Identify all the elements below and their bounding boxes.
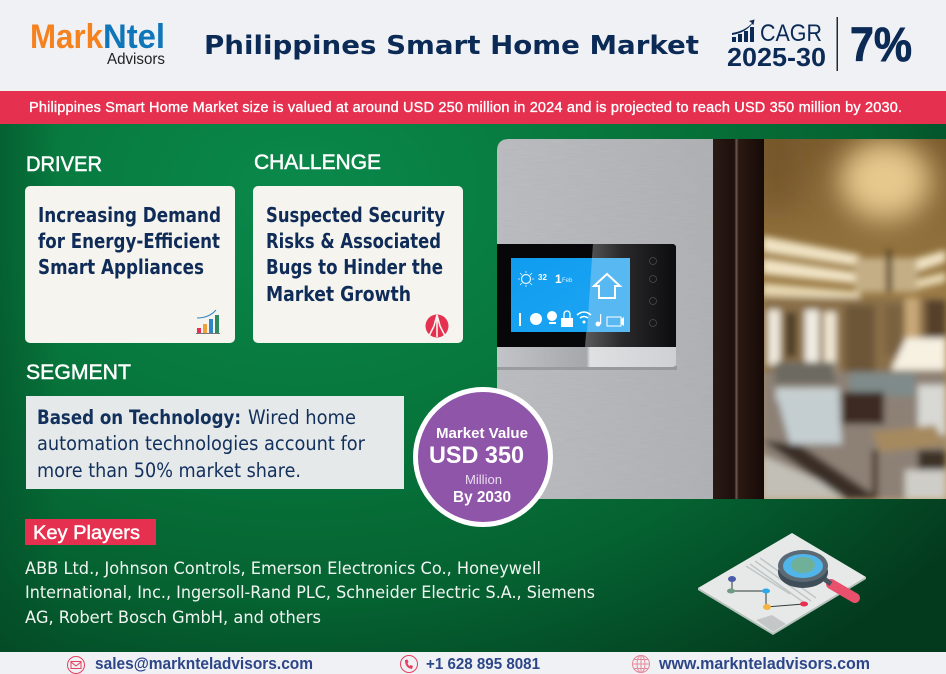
callout: market value circle: Market Value <box>436 425 528 442</box>
touch screen <box>511 258 630 332</box>
touch screen: Feb <box>562 278 573 284</box>
dark door frame <box>713 139 764 499</box>
key players badge <box>25 519 156 545</box>
driver text <box>38 203 221 279</box>
panel: key players <box>25 519 595 628</box>
wall control panel device <box>497 244 677 370</box>
callout: market value circle: Million <box>465 472 502 487</box>
segment box <box>26 396 404 489</box>
CAGR block: CAGR <box>760 20 822 47</box>
callout: market value circle: By 2030 <box>453 489 511 506</box>
panel: segment <box>26 360 404 489</box>
segment text: Wired home <box>248 406 356 429</box>
CAGR block <box>727 17 912 72</box>
device side buttons <box>650 258 656 326</box>
website contact: www.marknteladvisors.com <box>658 655 870 673</box>
header band <box>0 0 946 91</box>
panel: challenge <box>253 150 463 343</box>
CAGR block: 7% <box>850 19 912 72</box>
icon: growth bars and arrow <box>732 20 754 42</box>
blurred living room <box>762 139 946 499</box>
icon: document with magnifying glass <box>698 533 866 635</box>
panel: driver <box>25 152 235 343</box>
title: Philippines Smart Home Market <box>204 31 699 61</box>
icon: red challenge badge <box>426 314 448 338</box>
callout: market value circle: USD 350 <box>429 442 524 469</box>
challenge text <box>266 203 445 306</box>
challenge text: Suspected Security <box>266 203 445 227</box>
CAGR block: 2025-30 <box>727 42 826 72</box>
key players badge: Key Players <box>33 522 140 544</box>
segment text <box>37 406 366 482</box>
textured wall <box>497 139 714 499</box>
challenge text: Bugs to Hinder the <box>266 255 443 279</box>
segment text: more than 50% market share. <box>37 459 301 482</box>
email contact: sales@marknteladvisors.com <box>95 655 313 673</box>
driver card <box>25 186 235 343</box>
key players list: ABB Ltd., Johnson Controls, Emerson Electronics Co., Honeywell <box>25 559 541 579</box>
touch screen: 1 <box>555 272 562 286</box>
heading: segment: SEGMENT <box>26 360 131 384</box>
touch screen: 32 <box>538 273 547 282</box>
key players list: AG, Robert Bosch GmbH, and others <box>25 608 321 628</box>
key players list: International, Inc., Ingersoll-Rand PLC, Schneider Electric S.A., Siemens <box>25 583 595 603</box>
icon: bar chart <box>196 310 220 334</box>
segment text: Based on Technology: <box>37 406 241 429</box>
photo: smart home wall panel and room <box>497 139 946 499</box>
logo: MarkNtel Advisors: Advisors <box>107 51 165 68</box>
heading: challenge: CHALLENGE <box>254 150 381 174</box>
driver text: for Energy-Efficient <box>38 229 220 253</box>
footer contact bar <box>0 652 946 674</box>
logo: MarkNtel Advisors <box>30 18 165 68</box>
challenge text: Risks & Associated <box>266 229 441 253</box>
heading: driver: DRIVER <box>26 152 102 176</box>
challenge text: Market Growth <box>266 282 411 306</box>
driver text: Smart Appliances <box>38 255 204 279</box>
phone contact: +1 628 895 8081 <box>426 656 540 673</box>
driver text: Increasing Demand <box>38 203 221 227</box>
logo: MarkNtel Advisors: Ntel <box>103 18 165 56</box>
segment text: automation technologies account for <box>37 432 366 455</box>
callout: market value circle <box>416 390 550 524</box>
logo: MarkNtel Advisors: Mark <box>30 18 103 56</box>
key players list <box>25 559 595 628</box>
page background green <box>0 124 946 652</box>
challenge card <box>253 186 463 343</box>
red summary band <box>0 91 946 124</box>
red summary band: Philippines Smart Home Market size is valued at around USD 250 million in 2024 and is projected to reach USD 350 million by 2030. <box>29 100 902 116</box>
